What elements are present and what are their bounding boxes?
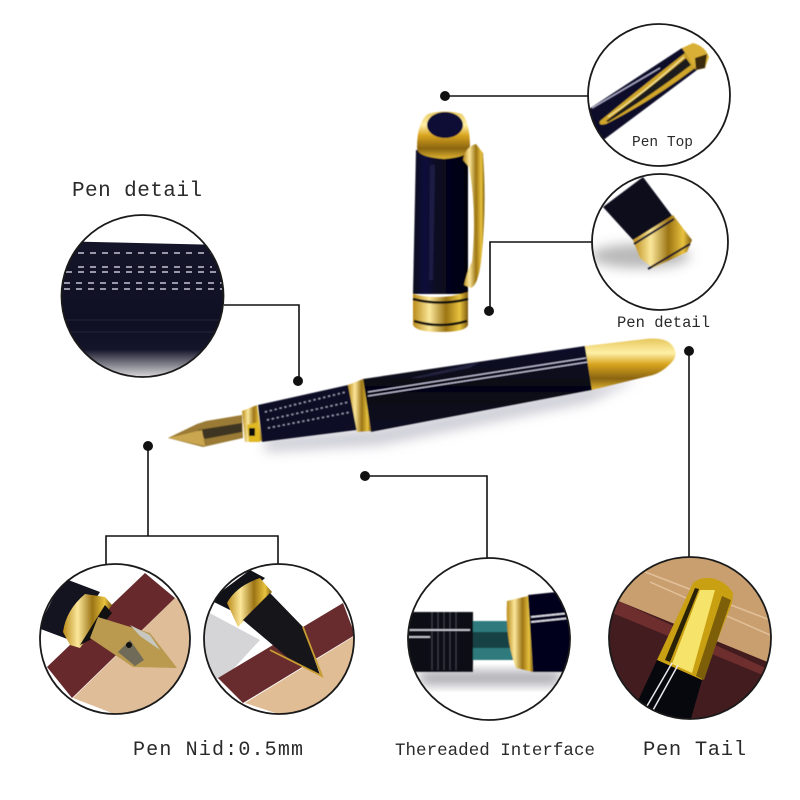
label: threaded interface: Thereaded Interface [395, 741, 595, 761]
shadow [590, 244, 690, 268]
ink converter [473, 621, 513, 660]
clipped photo [590, 177, 692, 269]
label: pen detail right: Pen detail [617, 314, 710, 332]
connector: threaded interface [360, 471, 487, 558]
barrel highlight [368, 358, 588, 396]
detail circle: pen top [575, 24, 730, 166]
detail circle: grip texture [50, 215, 225, 380]
cap highlight [429, 165, 435, 280]
clip [600, 53, 695, 125]
cap body [590, 48, 698, 140]
gold band [633, 215, 692, 268]
clipped photo [42, 573, 190, 714]
connector: cap detail [484, 242, 593, 316]
pen barrel [210, 570, 265, 610]
grip surface [62, 242, 223, 376]
label: pen tail: Pen Tail [643, 739, 746, 762]
texture dashes [64, 253, 222, 289]
light wood [245, 637, 353, 714]
pen barrel [363, 346, 592, 432]
label: pen top: Pen Top [632, 135, 693, 151]
middle ring [348, 379, 371, 432]
connector: pen tail [684, 346, 694, 558]
cap band rings [413, 299, 468, 325]
connector: left pen detail [224, 305, 303, 386]
label: pen nib: Pen Nid:0.5mm [133, 739, 303, 762]
gold ring [227, 578, 272, 627]
grey reflection [204, 610, 260, 680]
clipped photo [204, 570, 360, 720]
main pen [168, 339, 676, 452]
pen tail cap [585, 339, 676, 390]
dark wood [47, 573, 175, 698]
nib [168, 415, 243, 447]
detail circle: pen tail [605, 555, 775, 725]
nib silver [130, 625, 160, 650]
circle outline [588, 24, 730, 166]
wood grain [640, 570, 770, 635]
connector: pen top [440, 91, 589, 101]
body highlights [647, 663, 678, 712]
nib [90, 617, 177, 668]
pen barrel [42, 580, 100, 639]
front ring [242, 405, 262, 442]
feed [243, 593, 320, 675]
gold ring [63, 594, 112, 648]
circle outline [40, 564, 190, 714]
texture dark rows [62, 320, 224, 332]
circle outline [204, 564, 354, 714]
gold tail [657, 578, 733, 680]
nib edge [270, 627, 322, 676]
breather hole [126, 642, 132, 648]
light wood [73, 598, 190, 714]
shadow [420, 672, 560, 684]
circle outline [592, 174, 728, 310]
detail circle: cap band [590, 174, 728, 310]
label: pen detail left: Pen detail [72, 180, 202, 203]
gold ring [507, 596, 533, 672]
connector: pen nib [106, 441, 278, 564]
clipped photo [605, 555, 775, 725]
barrel highlights [531, 613, 570, 622]
light wood [605, 555, 775, 665]
threaded section [405, 612, 473, 672]
grip texture [265, 392, 351, 428]
wood reddish edge [610, 598, 770, 678]
clipped photo [590, 42, 710, 140]
cap barrel [413, 150, 468, 294]
band lines [634, 219, 690, 269]
black body [628, 660, 702, 722]
black collar [80, 605, 112, 645]
cap band [413, 292, 468, 332]
circle outline [408, 558, 570, 720]
clipped photo [62, 242, 223, 376]
cap body [603, 177, 673, 240]
cap crown [417, 112, 470, 159]
circle outline [609, 557, 771, 719]
detail circle: nib back [204, 564, 360, 720]
cap jewel [427, 112, 463, 138]
thread lines [432, 612, 456, 670]
cap clip [463, 144, 485, 288]
clipped photo [405, 590, 575, 684]
circle outline [62, 215, 224, 377]
highlight [592, 68, 660, 108]
detail circle: threaded interface [405, 558, 575, 720]
detail circle: nib front [38, 564, 200, 720]
barrel [528, 590, 575, 672]
dark wood [605, 590, 775, 725]
pen cap [413, 112, 485, 332]
dark wood [218, 603, 355, 703]
pen grip [258, 385, 357, 442]
crown [682, 43, 709, 70]
pen shadow [265, 378, 640, 452]
